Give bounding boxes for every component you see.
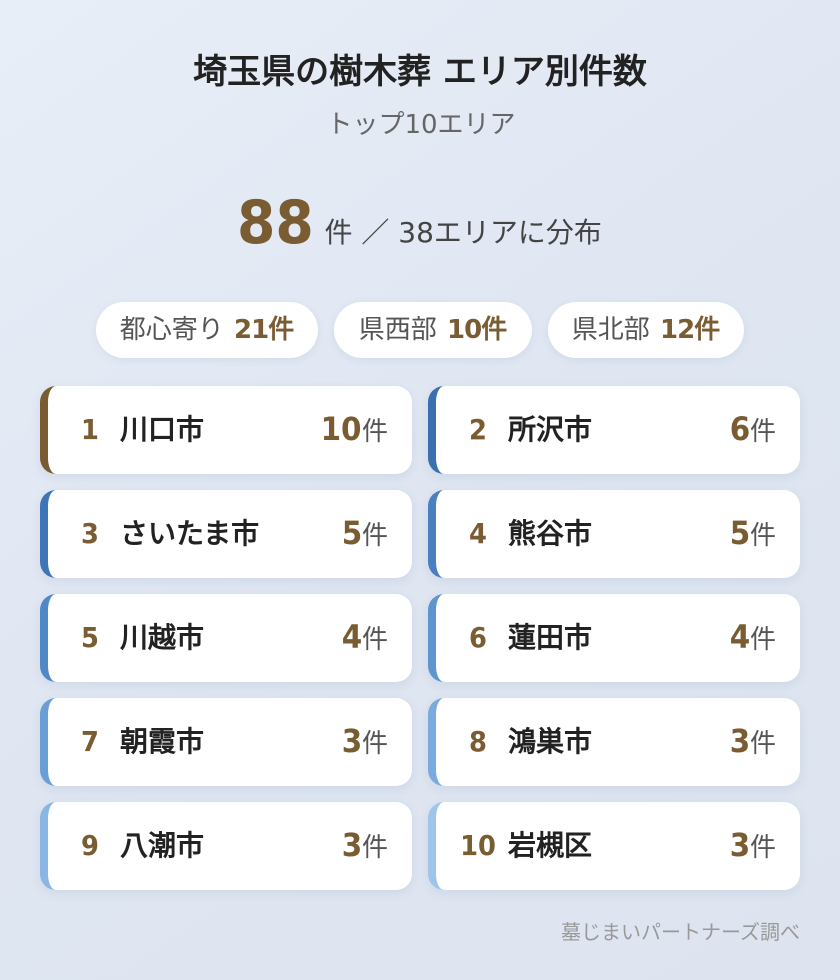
card: rank 2 所沢市 bbox=[428, 386, 800, 474]
pill: 都心寄り bbox=[96, 302, 318, 358]
card: rank 3 さいたま市 bbox=[40, 490, 412, 578]
pill: 県北部: 県北部 12件 bbox=[572, 315, 720, 345]
card: rank 7 朝霞市: 3 bbox=[342, 722, 362, 760]
card: rank 7 朝霞市: 朝霞市 bbox=[120, 725, 204, 758]
card: rank 6 蓮田市: 4 bbox=[730, 618, 750, 656]
card: rank 8 鴻巣市: 件 bbox=[750, 729, 776, 759]
card: rank 7 朝霞市 bbox=[40, 698, 412, 786]
pill: 県北部 bbox=[548, 302, 744, 358]
card: rank 5 川越市: 4 bbox=[342, 618, 362, 656]
total count headline: 88 bbox=[237, 188, 314, 258]
card: rank 3 さいたま市: 3 bbox=[81, 517, 99, 550]
card: rank 1 川口市: 10 bbox=[321, 410, 362, 448]
card: rank 4 熊谷市: 5 bbox=[730, 514, 750, 552]
card: rank 3 さいたま市: さいたま市 bbox=[120, 517, 259, 550]
card: rank 2 所沢市: 所沢市 bbox=[508, 413, 592, 446]
card: rank 3 さいたま市: 件 bbox=[362, 521, 388, 551]
card: rank 2 所沢市: 6 bbox=[730, 410, 750, 448]
card: rank 6 蓮田市 bbox=[428, 594, 800, 682]
card: rank 1 川口市: 川口市 bbox=[120, 413, 204, 446]
pill: 県西部: 県西部 10件 bbox=[359, 315, 507, 345]
card: rank 9 八潮市: 3 bbox=[342, 826, 362, 864]
card: rank 1 川口市: 1 bbox=[81, 413, 99, 446]
card: rank 8 鴻巣市: 8 bbox=[469, 725, 487, 758]
card: rank 2 所沢市: 件 bbox=[750, 417, 776, 447]
card: rank 6 蓮田市: 蓮田市 bbox=[508, 621, 592, 654]
card: rank 5 川越市: 5 bbox=[81, 621, 99, 654]
footer source note: 墓じまいパートナーズ調べ bbox=[561, 920, 800, 944]
card: rank 4 熊谷市 bbox=[428, 490, 800, 578]
card: rank 4 熊谷市: 熊谷市 bbox=[508, 517, 592, 550]
card: rank 10 岩槻区: 件 bbox=[750, 833, 776, 863]
card: rank 10 岩槻区: 3 bbox=[730, 826, 750, 864]
card: rank 9 八潮市: 9 bbox=[81, 829, 99, 862]
card: rank 1 川口市 bbox=[40, 386, 412, 474]
total count headline bbox=[237, 188, 602, 258]
card: rank 8 鴻巣市: 3 bbox=[730, 722, 750, 760]
card: rank 9 八潮市: 八潮市 bbox=[120, 829, 204, 862]
card: rank 7 朝霞市: 7 bbox=[81, 725, 99, 758]
card: rank 8 鴻巣市 bbox=[428, 698, 800, 786]
card: rank 5 川越市: 件 bbox=[362, 625, 388, 655]
card: rank 10 岩槻区 bbox=[428, 802, 800, 890]
card: rank 2 所沢市: 2 bbox=[469, 413, 487, 446]
card: rank 4 熊谷市: 4 bbox=[469, 517, 487, 550]
card: rank 9 八潮市 bbox=[40, 802, 412, 890]
card: rank 8 鴻巣市: 鴻巣市 bbox=[508, 725, 592, 758]
card: rank 3 さいたま市: 5 bbox=[342, 514, 362, 552]
card: rank 5 川越市: 川越市 bbox=[120, 621, 204, 654]
subtitle: トップ10エリア bbox=[326, 110, 516, 140]
card: rank 10 岩槻区: 岩槻区 bbox=[508, 829, 592, 862]
card: rank 5 川越市 bbox=[40, 594, 412, 682]
pill: 県西部 bbox=[334, 302, 532, 358]
card: rank 1 川口市: 件 bbox=[362, 417, 388, 447]
pill: 都心寄り: 都心寄り 21件 bbox=[120, 315, 294, 345]
card: rank 9 八潮市: 件 bbox=[362, 833, 388, 863]
card: rank 6 蓮田市: 件 bbox=[750, 625, 776, 655]
card: rank 10 岩槻区: 10 bbox=[460, 829, 496, 862]
title: 埼玉県の樹木葬 エリア別件数 bbox=[193, 52, 647, 92]
card: rank 6 蓮田市: 6 bbox=[469, 621, 487, 654]
card: rank 4 熊谷市: 件 bbox=[750, 521, 776, 551]
card: rank 7 朝霞市: 件 bbox=[362, 729, 388, 759]
total count headline: 件 ／ 38エリアに分布 bbox=[324, 216, 602, 249]
